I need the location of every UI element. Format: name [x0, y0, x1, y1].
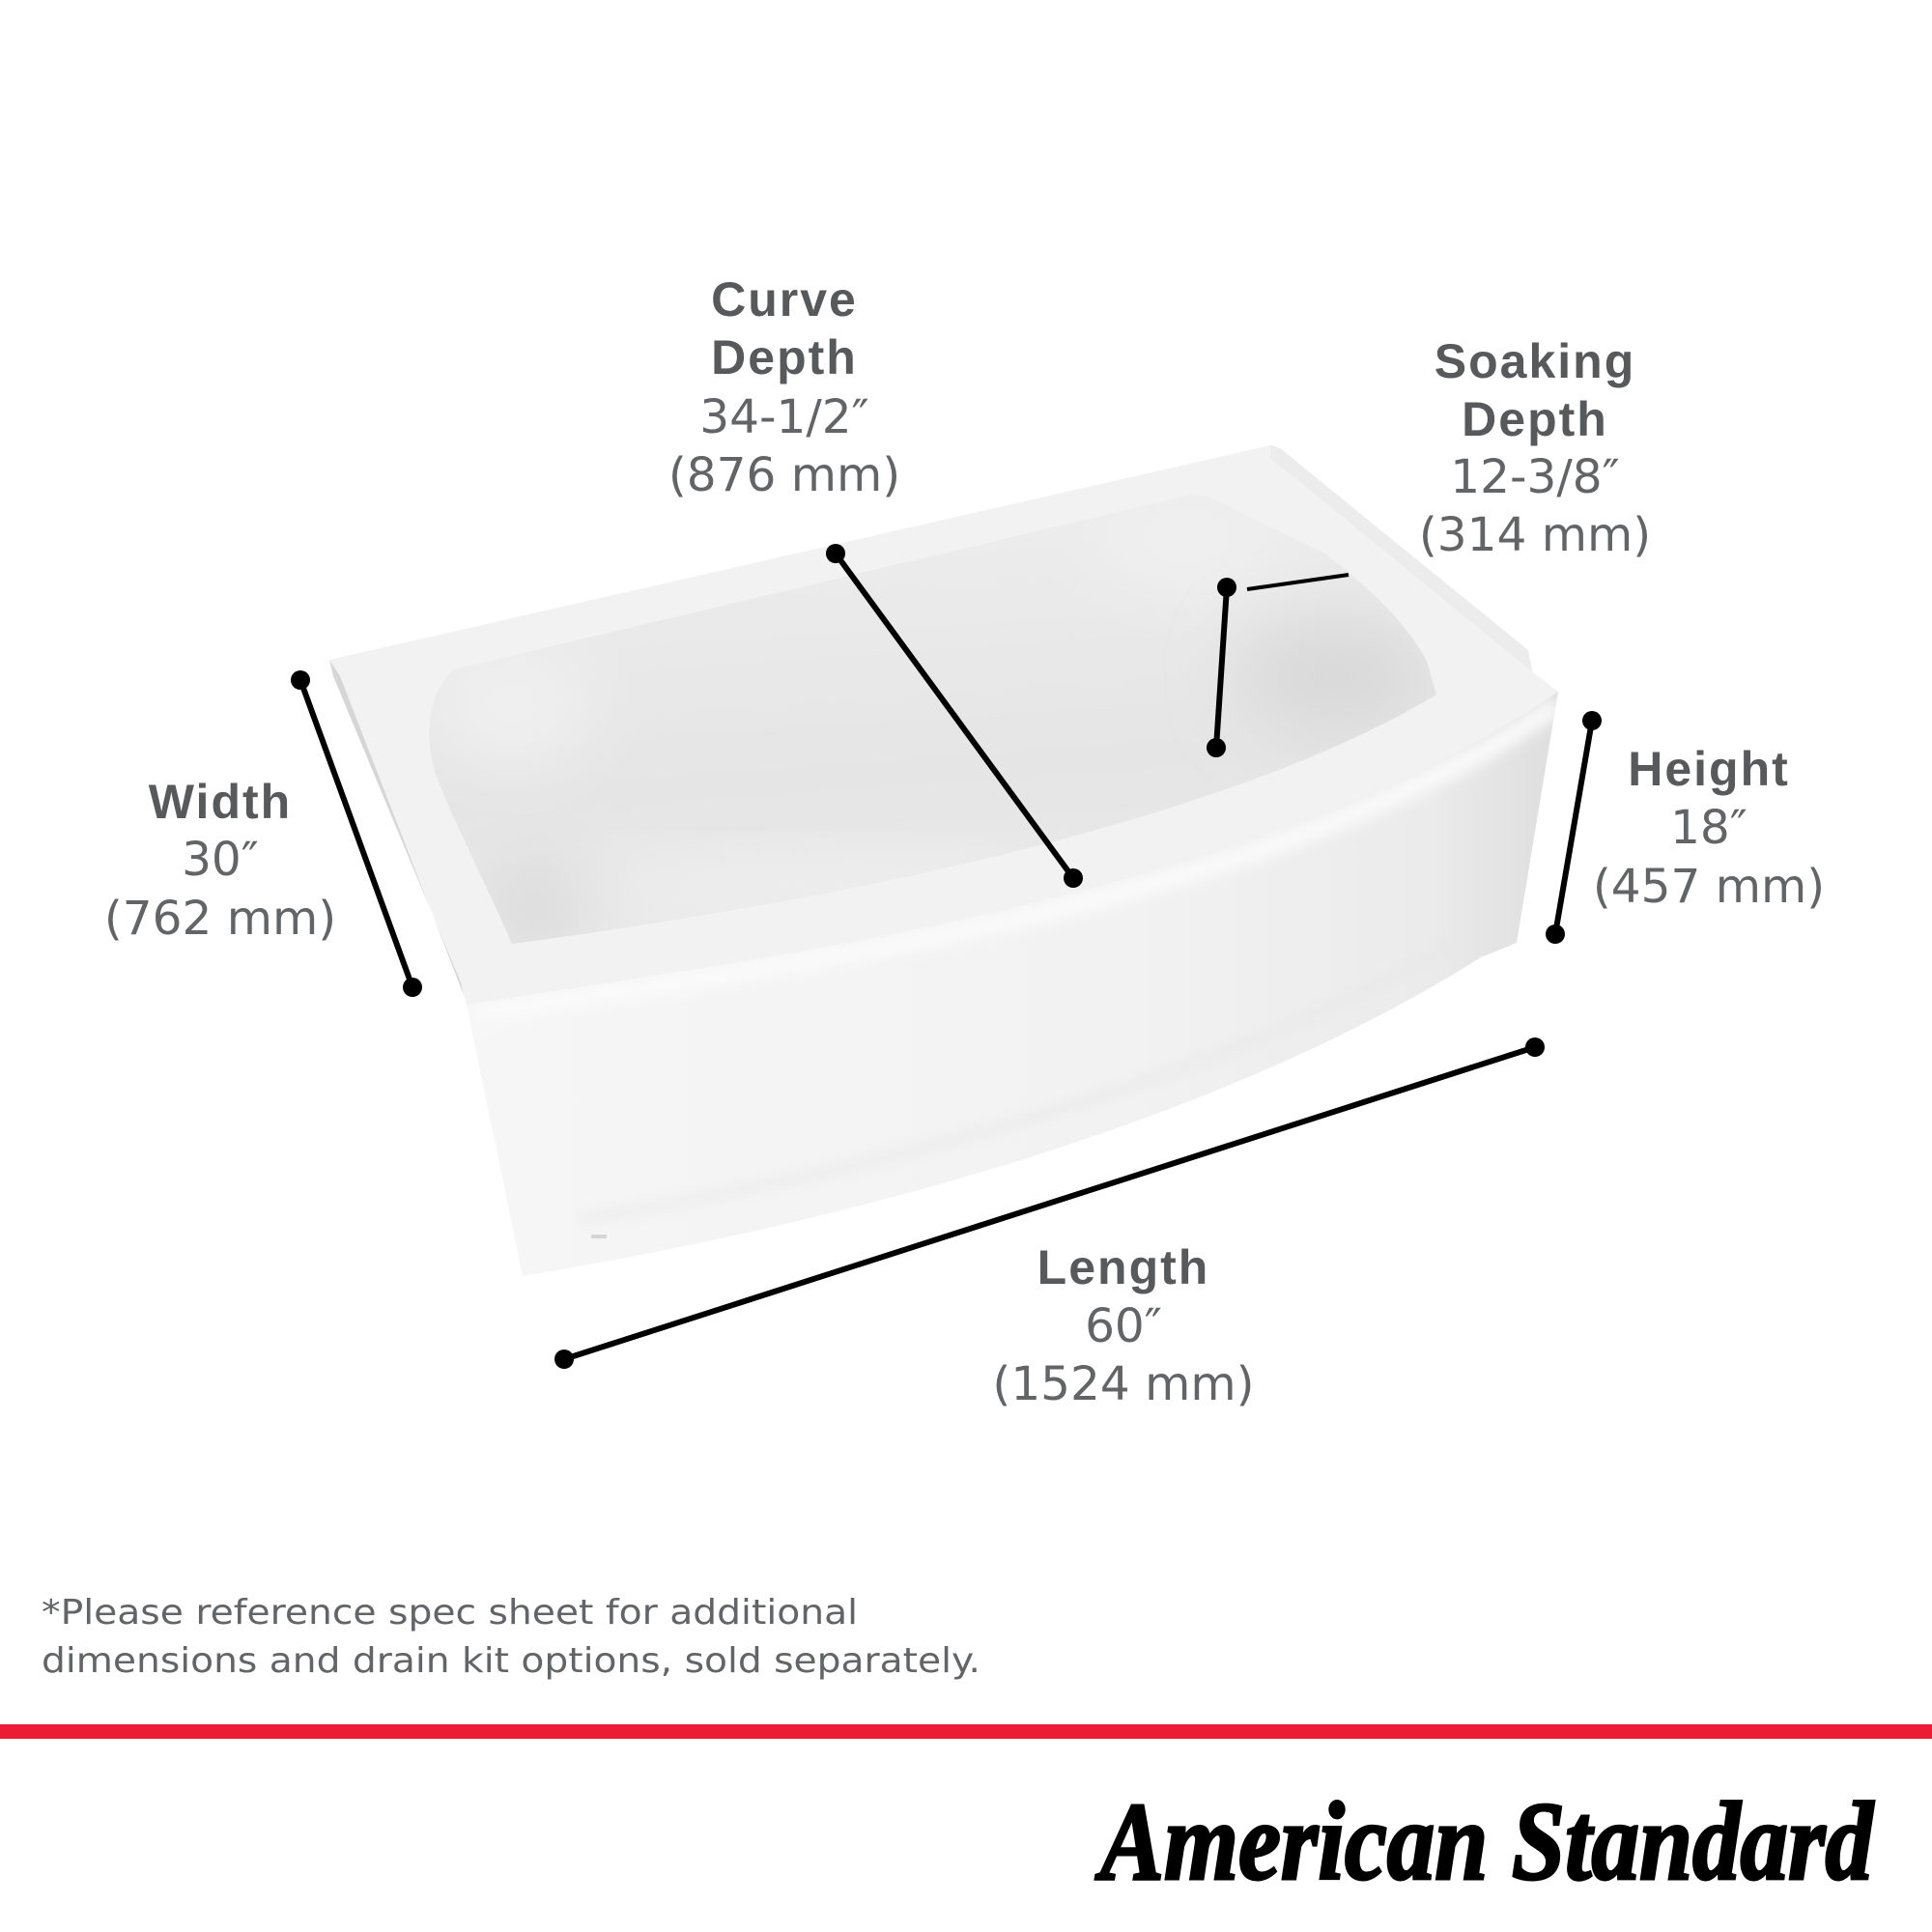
- label: width: [104, 775, 336, 946]
- label: height: 18″: [1670, 801, 1747, 855]
- tub right flange: [1256, 445, 1533, 696]
- label: length: Length: [1037, 1240, 1209, 1294]
- label: width: (762 mm): [104, 892, 336, 946]
- tub apron inset line: [580, 945, 1449, 1219]
- tub front apron: [467, 692, 1558, 1276]
- label: length: [992, 1240, 1255, 1411]
- tub interior basin: [429, 554, 1436, 944]
- red divider bar: [0, 1724, 1932, 1739]
- label: height: [1593, 742, 1825, 914]
- dimension line: width: [291, 670, 422, 997]
- label: curve depth: Depth: [711, 330, 858, 384]
- label: length: 60″: [1085, 1299, 1162, 1353]
- label: curve depth: 34-1/2″: [699, 390, 869, 444]
- label: curve depth: Curve: [711, 272, 858, 327]
- tub left side edge: [329, 660, 464, 995]
- label: soaking depth: Soaking: [1435, 334, 1635, 388]
- dimension line: curve depth: [826, 544, 1083, 888]
- label: height: Height: [1628, 742, 1790, 796]
- label: width: 30″: [182, 833, 259, 887]
- tub lip highlight: [1166, 698, 1556, 883]
- label: soaking depth: [1419, 334, 1651, 562]
- label: curve depth: (876 mm): [668, 448, 900, 502]
- dimension line: soaking depth: [1207, 575, 1349, 757]
- footnote: [42, 1593, 980, 1681]
- label: width: Width: [149, 775, 292, 829]
- tub small badge: [591, 1235, 607, 1238]
- label: curve depth: [668, 272, 900, 502]
- label: soaking depth: Depth: [1462, 392, 1608, 446]
- label: length: (1524 mm): [992, 1357, 1255, 1411]
- label: soaking depth: (314 mm): [1419, 508, 1651, 562]
- footnote: *Please reference spec sheet for additional: [42, 1593, 858, 1633]
- tub deck rim: [329, 445, 1558, 1005]
- illustration: bathtub: [329, 445, 1558, 1276]
- label: height: (457 mm): [1593, 860, 1825, 914]
- label: soaking depth: 12-3/8″: [1450, 450, 1620, 504]
- footnote: dimensions and drain kit options, sold separately.: [42, 1641, 980, 1681]
- dimension line: length: [554, 1037, 1545, 1369]
- dimension line: height: [1546, 711, 1602, 944]
